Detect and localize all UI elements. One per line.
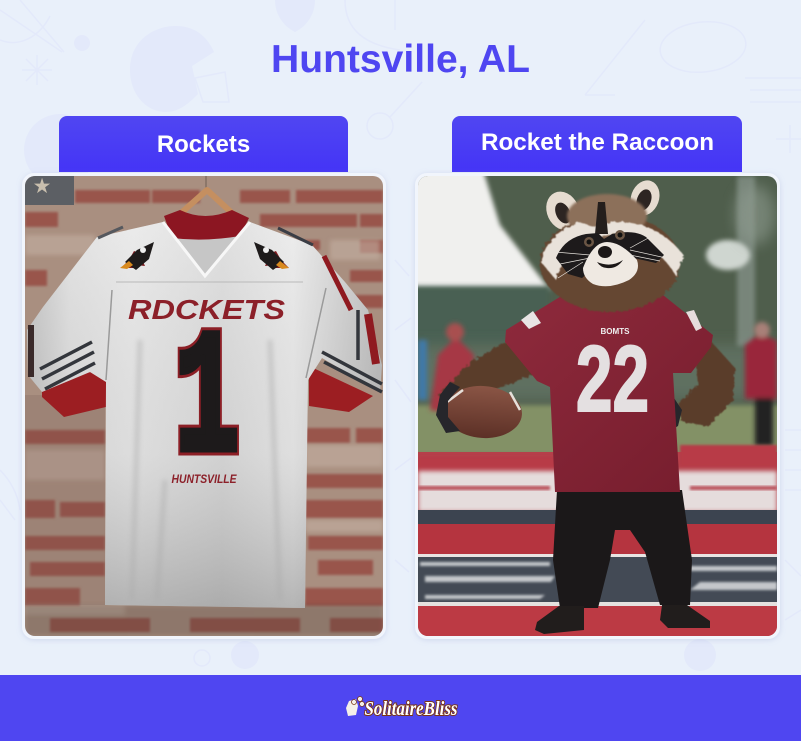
jersey number 22: 22 [576,328,649,432]
maroon jersey [505,295,713,492]
logo card icon [346,696,364,716]
panel: Rocket the Raccoon mascot photo [400,160,800,639]
title: Huntsville, AL [271,38,530,81]
track stripes [418,445,777,636]
arms [438,336,735,426]
muzzle [583,242,638,286]
jersey number: 1 [174,304,240,502]
jersey [27,210,382,608]
brick wall [25,176,383,636]
crown [567,194,647,238]
heading tab: Rocket the Raccoon [452,116,742,172]
heading tab: Rocket the Raccoon: Rocket the Raccoon [481,129,714,156]
shoes [535,605,710,634]
forehead stripe [595,202,608,234]
jersey folds [132,340,280,556]
inner neck [178,236,236,274]
red collar [164,210,249,240]
ears [546,180,660,230]
gloves [436,382,682,433]
jersey body and sleeves [27,222,382,608]
blurred spectators [418,322,777,446]
rocket patch left [120,242,154,270]
footer bar [0,675,801,741]
whiskers [555,236,666,278]
blurred stadium background [418,176,777,452]
jersey wordmark: RDCKETS [128,294,285,325]
heading tab: Rockets [59,116,348,172]
eyes [584,230,625,247]
raccoon head [540,176,684,312]
rocket patch right [254,242,289,270]
football [448,386,522,438]
logo: Solitaire Bliss [346,696,458,720]
jersey number: 1 [174,304,240,502]
jersey number [178,327,239,456]
flag corner with star [25,175,74,205]
jersey wordmark: BOMTS [600,327,630,336]
sleeve numbers [521,310,702,331]
mane [540,214,680,312]
white fur band [541,221,684,280]
flag corner with star: ★ [33,175,51,198]
eye mask [556,232,664,278]
decorative sports pattern [24,0,716,671]
raccoon mascot [436,176,735,634]
heading tab: Rockets: Rockets [157,131,250,158]
nose and mouth [597,246,623,268]
logo: Solitaire Bliss: SolitaireBliss [364,698,458,720]
pants [553,490,692,608]
sleeve stripes [40,310,382,392]
jersey city text: HUNTSVILLE [172,472,237,486]
sleeve linings [42,370,110,417]
panel: Rockets jersey photo [22,173,386,639]
hanger [180,176,233,214]
